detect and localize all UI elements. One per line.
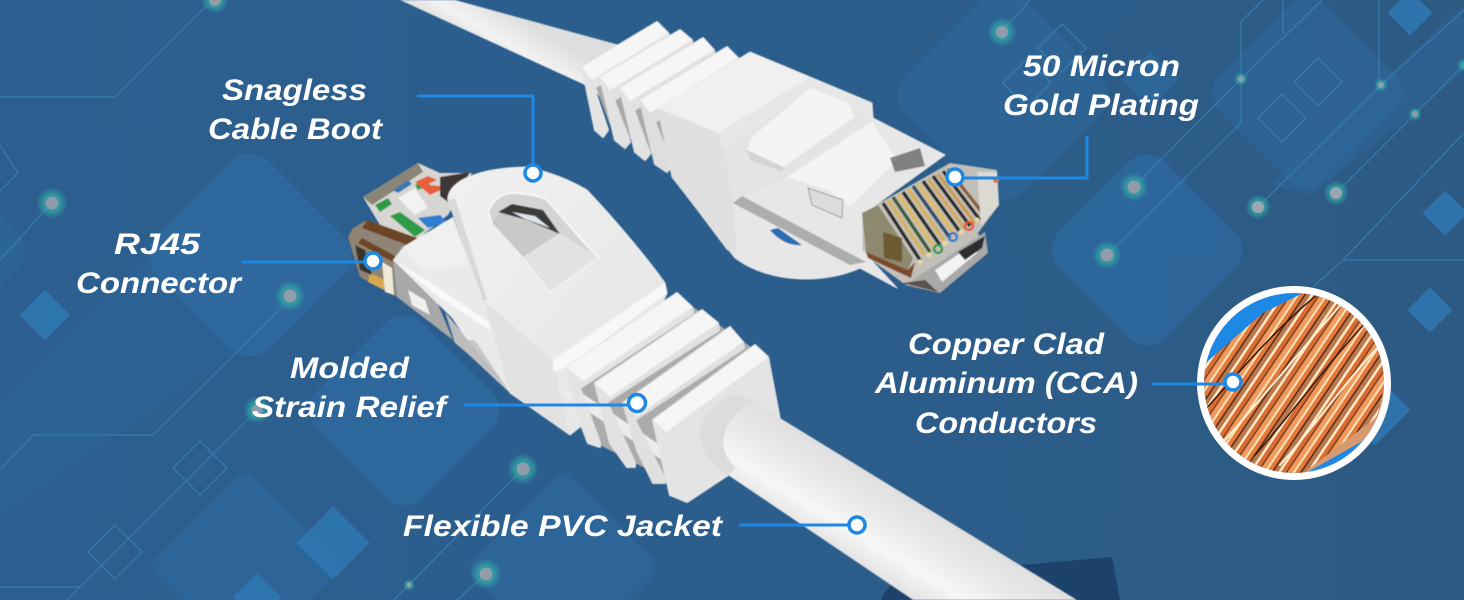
leader: 50 Micron Gold Plating xyxy=(947,136,1087,185)
lower RJ45 connector xyxy=(348,163,1077,600)
left face xyxy=(658,108,737,254)
latch plate xyxy=(725,88,872,203)
lower body xyxy=(393,217,510,393)
top face xyxy=(658,52,810,133)
upper cable xyxy=(400,0,630,100)
leader: Copper Clad Aluminum xyxy=(1152,374,1241,390)
label: Snagless Cable Boot: Cable Boot xyxy=(208,113,384,146)
boot window xyxy=(488,193,598,292)
label: Flexible PVC Jacket: Flexible PVC Jacket xyxy=(403,510,724,543)
boot xyxy=(448,167,667,435)
label: RJ45 Connector: Connector xyxy=(76,267,244,300)
leader: Snagless Cable Boot xyxy=(417,96,541,181)
label: Copper Clad Aluminum (CCA) Conductors: Copper Clad xyxy=(908,328,1105,361)
H crossbar xyxy=(560,390,662,460)
label: RJ45 Connector xyxy=(76,228,244,300)
label: Copper Clad Aluminum (CCA) Conductors: Aluminum (CCA) xyxy=(874,367,1138,400)
leader: Flexible PVC Jacket xyxy=(739,517,865,533)
glass head (upper) xyxy=(862,163,999,293)
leader: Molded Strain Relief xyxy=(464,394,646,412)
label: Copper Clad Aluminum (CCA) Conductors xyxy=(874,328,1138,440)
label: 50 Micron Gold Plating: Gold Plating xyxy=(1003,89,1199,122)
copper conductors inset xyxy=(1195,280,1400,480)
label: Snagless Cable Boot: Snagless xyxy=(222,74,367,107)
label: Copper Clad Aluminum (CCA) Conductors: Conductors xyxy=(915,407,1097,440)
lower cable xyxy=(700,395,1077,600)
label: Molded Strain Relief: Strain Relief xyxy=(252,391,449,424)
head glass (upper) xyxy=(363,163,472,245)
head glass (lower) xyxy=(348,220,417,297)
leader: RJ45 Connector xyxy=(242,253,381,269)
strain relief ribs (lower) xyxy=(567,293,780,502)
gold contacts xyxy=(883,169,985,260)
latch xyxy=(905,232,988,293)
plastic body silhouette xyxy=(658,52,945,288)
label: Molded Strain Relief xyxy=(252,352,449,424)
strain relief ribs (upper) xyxy=(582,22,739,172)
rib core (lower) xyxy=(570,298,770,480)
label: Molded Strain Relief: Molded xyxy=(290,352,410,385)
upper RJ45 connector xyxy=(582,22,999,293)
label: Snagless Cable Boot xyxy=(208,74,384,146)
label: 50 Micron Gold Plating: 50 Micron xyxy=(1023,50,1180,83)
label: 50 Micron Gold Plating xyxy=(1003,50,1199,122)
label: RJ45 Connector: RJ45 xyxy=(114,228,202,261)
rib core (upper) xyxy=(590,30,735,165)
